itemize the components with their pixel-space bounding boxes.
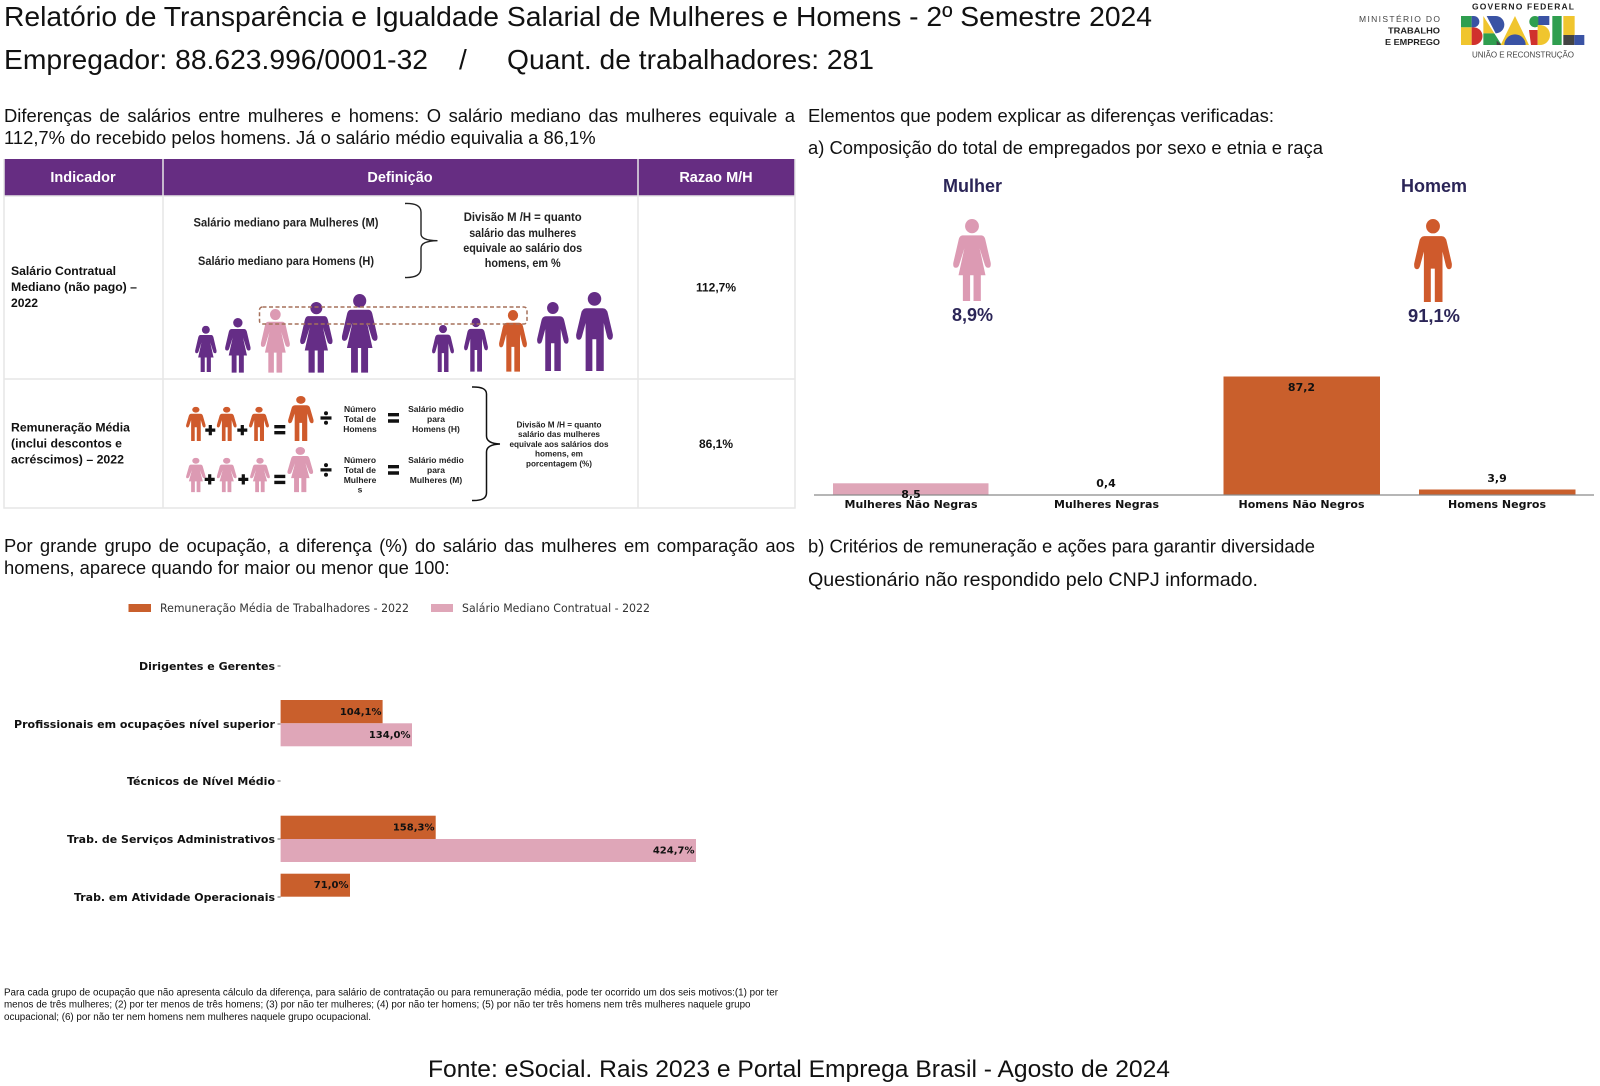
women sum icons: [186, 447, 313, 492]
mean formula labels: women: Mulheres (M): [410, 475, 462, 485]
mean formula labels: women: Mulhere: [344, 475, 377, 485]
mean formula labels: men: [343, 404, 464, 434]
row label: mean pay: [11, 420, 130, 466]
mean formula labels: women: s: [358, 484, 363, 494]
value labels: 8,5: [901, 488, 921, 501]
bar value labels: 104,1%: [340, 707, 382, 718]
value labels: 87,2: [1288, 381, 1315, 394]
mean formula labels: women: Total de: [344, 465, 376, 475]
logo: government: UNIÃO E RECONSTRUÇÃO: [1472, 50, 1574, 60]
chart legend: Remuneração Média de Trabalhadores - 2022: [160, 601, 409, 615]
mean formula labels: men: Número: [344, 404, 376, 414]
brace: mean: [472, 387, 500, 501]
mean division explanation: porcentagem (%): [526, 458, 592, 468]
logo: government: MINISTÉRIO DO: [1359, 14, 1440, 24]
median division explanation: salário das mulheres: [469, 228, 576, 240]
math operators: [205, 411, 399, 484]
table header: Razao M/H: [679, 170, 753, 186]
median salary labels: Salário mediano para Mulheres (M): [194, 218, 379, 230]
row label: median salary: Salário Contratual: [11, 264, 116, 278]
row label: mean pay: acréscimos) – 2022: [11, 452, 124, 466]
category labels: Mulheres Negras: [1054, 498, 1159, 511]
row label: mean pay: Remuneração Média: [11, 420, 130, 434]
bars: [281, 700, 383, 723]
woman share: 8,9%: [952, 304, 993, 325]
footnote: [4, 988, 779, 1023]
category labels: Mulheres Não Negras: [844, 498, 978, 511]
table header: [4, 159, 795, 196]
man share: Homem: [1401, 175, 1467, 196]
mean formula labels: men: Homens (H): [412, 424, 460, 434]
subheading a: a) Composição do total de empregados por sexo e etnia e raça: [808, 137, 1324, 158]
bar value labels: 158,3%: [393, 823, 434, 834]
chart legend: [128, 601, 650, 615]
median salary labels: Salário mediano para Homens (H): [198, 256, 374, 268]
woman share: [943, 175, 1002, 325]
bar value labels: [314, 707, 694, 891]
text block: salary differences: Diferenças de salários entre mulheres e homens: O salário mediano das mulheres equivale a: [4, 105, 795, 126]
mean formula labels: men: Homens: [343, 424, 377, 434]
mean formula labels: men: para: [427, 414, 445, 424]
occupation labels: Trab. em Atividade Operacionais: [74, 891, 275, 904]
median division explanation: [463, 212, 582, 270]
footnote: ocupacional; (6) por não ter nem homens nem mulheres naquele grupo ocupacional.: [4, 1012, 371, 1023]
table header: Definição: [367, 170, 433, 186]
man share: [1401, 175, 1467, 326]
title: Relatório de Transparência e Igualdade Salarial de Mulheres e Homens - 2º Semestre 2024: [4, 1, 1152, 32]
median division explanation: homens, em %: [485, 258, 561, 270]
employer and worker count: Quant. de trabalhadores: 281: [507, 44, 874, 75]
value labels: 0,4: [1096, 477, 1116, 490]
row label: median salary: 2022: [11, 296, 38, 310]
icons: women by salary: [195, 294, 378, 373]
mean formula labels: men: Salário médio: [408, 404, 464, 414]
value: median ratio: 112,7%: [696, 280, 736, 294]
men sum icons: [186, 396, 314, 441]
questionnaire note: Questionário não respondido pelo CNPJ informado.: [808, 569, 1258, 591]
occupation labels: [14, 660, 276, 904]
right heading: explaining elements: Elementos que podem explicar as diferenças verificadas:: [808, 105, 1274, 126]
mean formula labels: women: Número: [344, 455, 376, 465]
bar value labels: 424,7%: [653, 846, 694, 857]
employer and worker count: [4, 44, 874, 75]
brace: median: [405, 203, 438, 278]
bar chart: occupational groups: [14, 660, 696, 904]
category labels: [844, 498, 1546, 511]
footnote: Para cada grupo de ocupação que não apresenta cálculo da diferença, para salário de contratação ou para remuneração média, pode ter ocorrido um dos seis motivos:(1) por ter: [4, 988, 779, 998]
median division explanation: Divisão M /H = quanto: [464, 212, 582, 224]
mean formula labels: women: para: [427, 465, 445, 475]
text block: salary differences: [4, 105, 795, 148]
icons: men by salary: [432, 292, 613, 372]
mean formula labels: men: Total de: [344, 414, 376, 424]
bar value labels: 71,0%: [314, 880, 348, 891]
text block: occupational groups intro: homens, aparece quando for maior ou menor que 100:: [4, 557, 450, 578]
value labels: 3,9: [1487, 472, 1507, 485]
text block: occupational groups intro: [4, 535, 795, 578]
table header: Indicador: [50, 170, 116, 186]
employer and worker count: /: [459, 44, 467, 75]
mean division explanation: homens, em: [535, 449, 583, 459]
occupation labels: Profissionais em ocupações nível superior: [14, 718, 276, 731]
mean division explanation: salário das mulheres: [518, 429, 600, 439]
category labels: Homens Não Negros: [1238, 498, 1365, 511]
value: mean ratio: 86,1%: [699, 437, 733, 451]
occupation labels: Trab. de Serviços Administrativos: [67, 833, 275, 846]
chart legend: Salário Mediano Contratual - 2022: [462, 601, 650, 615]
mean formula labels: women: Salário médio: [408, 455, 464, 465]
subheading b: b) Critérios de remuneração e ações para garantir diversidade: [808, 536, 1315, 556]
bars: [833, 376, 1576, 495]
bar chart: composition by sex and race: [814, 376, 1594, 511]
row label: mean pay: (inclui descontos e: [11, 436, 122, 450]
occupation labels: Técnicos de Nível Médio: [127, 775, 275, 788]
row label: median salary: [11, 264, 137, 310]
median salary labels: [194, 218, 379, 268]
mean division explanation: equivale aos salários dos: [510, 439, 609, 449]
woman share: Mulher: [943, 175, 1002, 196]
source: Fonte: eSocial. Rais 2023 e Portal Emprega Brasil - Agosto de 2024: [428, 1056, 1170, 1083]
mean formula labels: women: [344, 455, 464, 494]
logo: government: E EMPREGO: [1385, 37, 1440, 47]
logo: government: GOVERNO FEDERAL: [1472, 2, 1574, 12]
text block: occupational groups intro: Por grande grupo de ocupação, a diferença (%) do salário das mulheres em comparação aos: [4, 535, 795, 556]
bar value labels: 134,0%: [369, 730, 410, 741]
table: indicators: [4, 159, 795, 508]
category labels: Homens Negros: [1448, 498, 1546, 511]
occupation labels: Dirigentes e Gerentes: [139, 660, 275, 673]
mean division explanation: Divisão M /H = quanto: [516, 419, 602, 429]
row label: median salary: Mediano (não pago) –: [11, 280, 137, 294]
median division explanation: equivale ao salário dos: [463, 243, 582, 255]
dashed median highlight: [260, 307, 527, 324]
logo: government: [1359, 2, 1584, 60]
text block: salary differences: 112,7% do recebido pelos homens. Já o salário médio equivalia a 86,1%: [4, 127, 596, 148]
mean division explanation: [510, 419, 609, 468]
logo: government: TRABALHO: [1388, 26, 1440, 36]
employer and worker count: Empregador: 88.623.996/0001-32: [4, 44, 428, 75]
value labels: [901, 381, 1507, 501]
footnote: menos de três mulheres; (2) por ter menos de três homens; (3) por não ter mulheres; (4) por não ter homens; (5) por não ter três homens nem três mulheres naquele grupo: [4, 1000, 751, 1010]
man share: 91,1%: [1408, 305, 1460, 326]
